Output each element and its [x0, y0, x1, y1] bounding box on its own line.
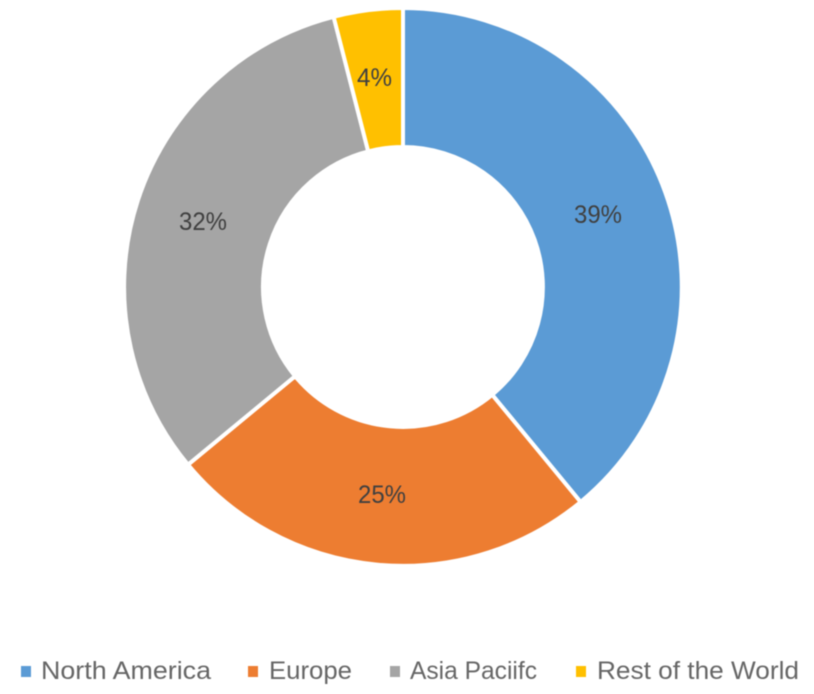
legend item: Rest of the World: Rest of the World	[597, 657, 799, 685]
data labels	[179, 64, 622, 509]
segment: Rest of the World 4%	[334, 8, 403, 151]
label: 32%: 32%	[179, 208, 227, 236]
label: 4%: 4%	[357, 64, 392, 92]
label: 25%: 25%	[358, 481, 406, 509]
segment: Asia Pacific 32%	[124, 17, 368, 465]
legend	[21, 657, 799, 685]
legend item: North America: North America	[41, 657, 211, 685]
segment: North America 39%	[403, 8, 682, 502]
label: 39%: 39%	[574, 201, 622, 229]
donut chart	[124, 8, 682, 566]
legend item: Asia Pacific: Asia Paciifc	[410, 657, 537, 685]
legend item: Europe: Europe	[269, 657, 352, 685]
segment: Europe 25%	[188, 376, 581, 566]
